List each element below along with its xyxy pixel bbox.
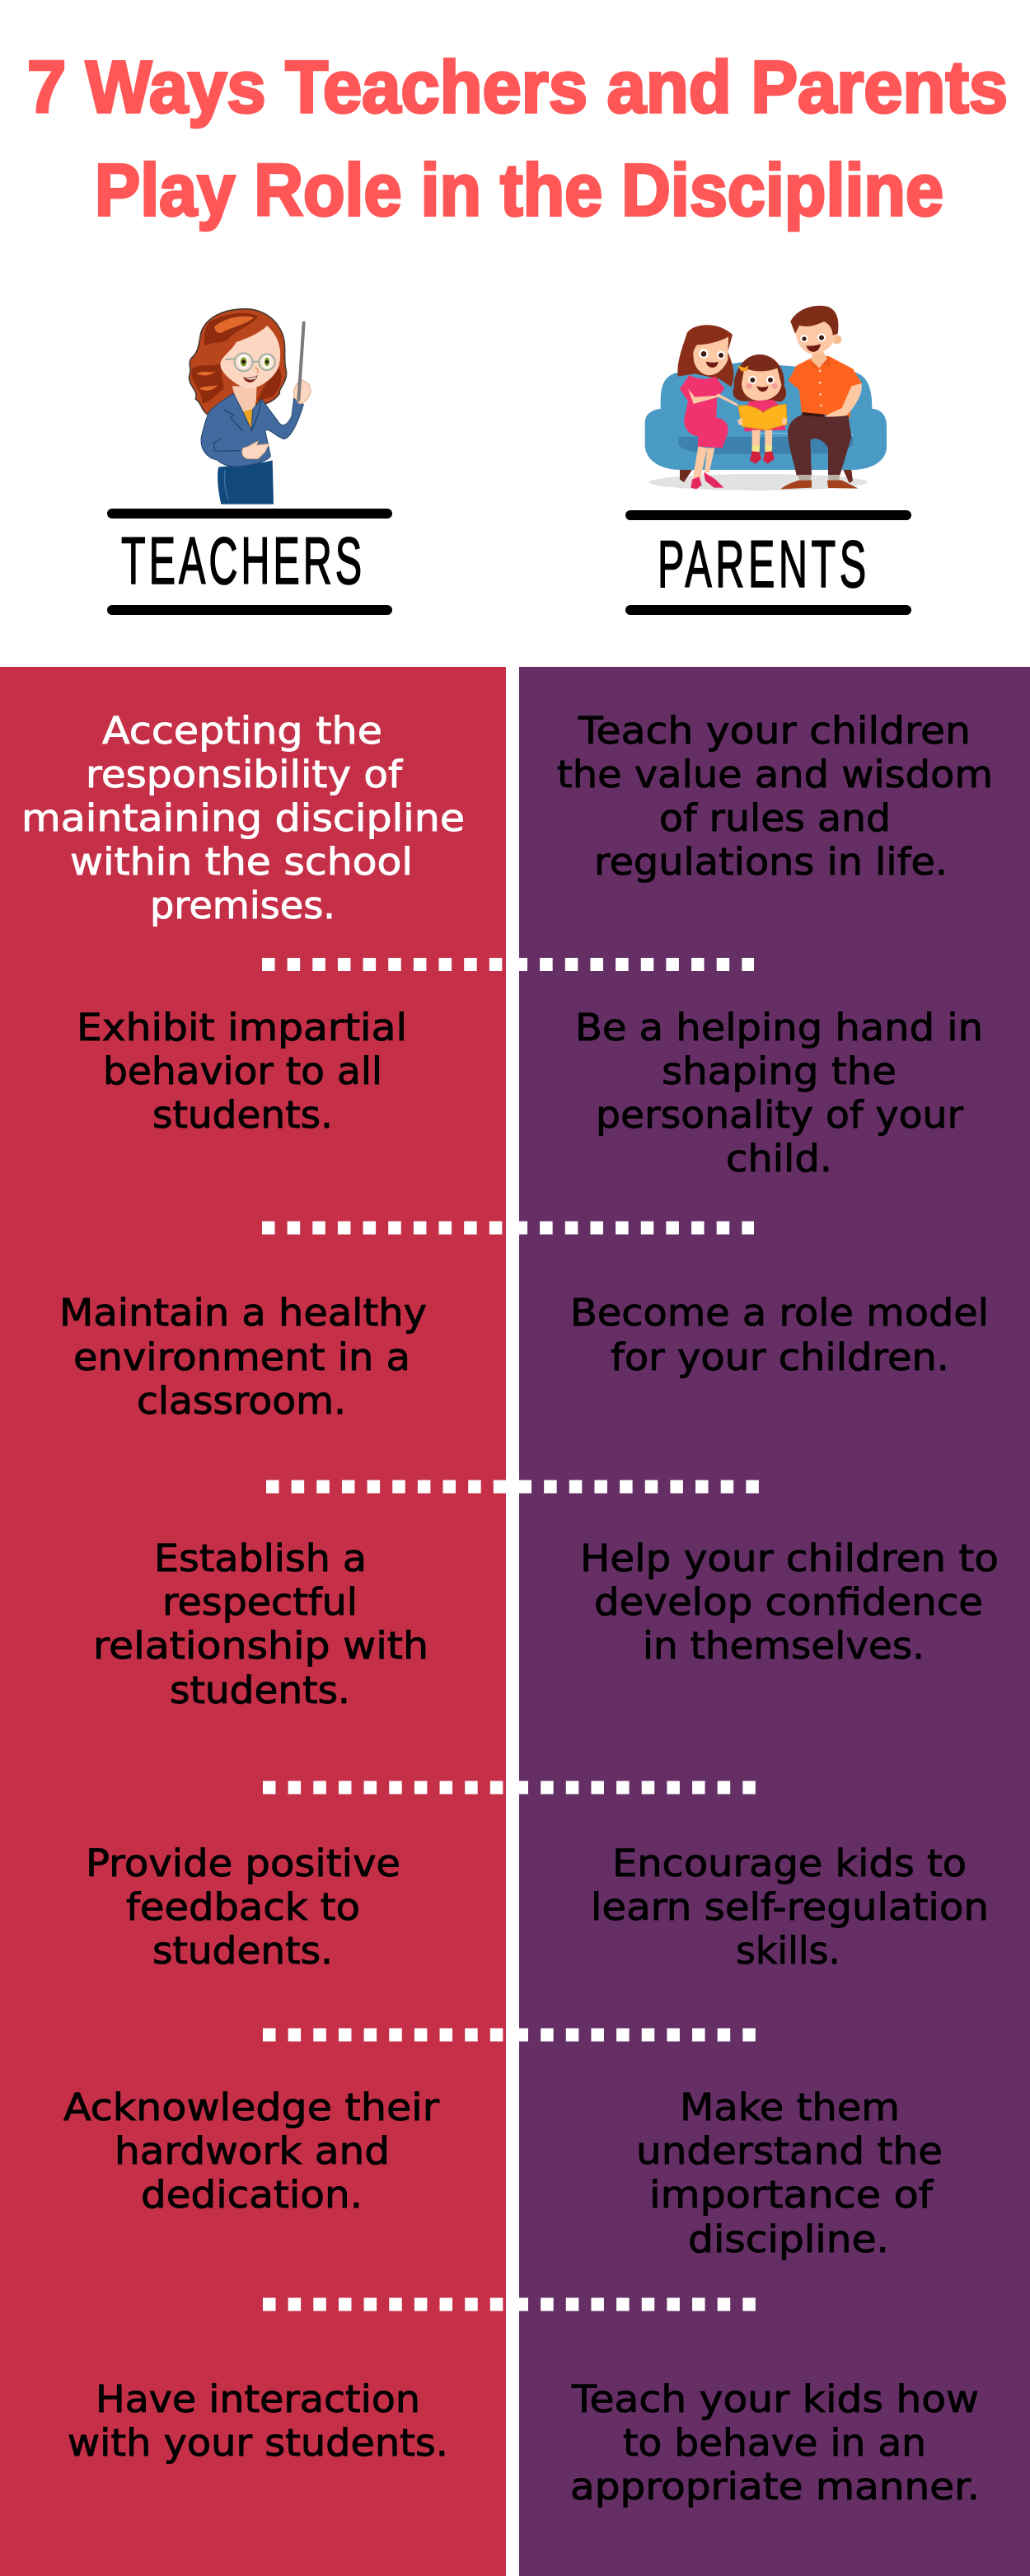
teachers item 6: hardwork and xyxy=(115,2129,390,2173)
teachers item 3: environment in a xyxy=(73,1335,410,1379)
parents item 4: develop confidence xyxy=(594,1580,983,1624)
dotted divider 1 xyxy=(262,958,754,971)
dotted divider 3 xyxy=(266,1480,759,1494)
teachers item 3 xyxy=(59,1291,427,1423)
parents item 3: for your children. xyxy=(611,1335,949,1379)
teachers item 6: dedication. xyxy=(141,2173,363,2217)
teachers item 4 xyxy=(93,1537,428,1712)
parents item 1: the value and wisdom xyxy=(557,753,993,796)
teachers item 6 xyxy=(63,2086,440,2217)
parents item 7: to behave in an xyxy=(623,2421,926,2465)
teachers item 3: Maintain a healthy xyxy=(59,1291,427,1335)
dotted divider 5 xyxy=(263,2028,756,2041)
parents item 2: shaping the xyxy=(662,1049,897,1093)
teachers item 1: premises. xyxy=(150,884,335,927)
teachers item 1: maintaining discipline xyxy=(21,796,465,840)
title: 7 Ways Teachers and Parents xyxy=(27,45,1008,128)
teachers item 4: students. xyxy=(170,1668,350,1712)
teachers label: TEACHERS xyxy=(121,524,362,598)
parents item 5: skills. xyxy=(736,1929,840,1973)
parents item 1: regulations in life. xyxy=(594,840,948,884)
teachers item 7: Have interaction xyxy=(96,2377,420,2421)
icon: teacher illustration xyxy=(190,309,311,504)
title xyxy=(27,45,1008,231)
panel: teachers column xyxy=(0,667,506,2576)
dotted divider 4 xyxy=(263,1781,756,1794)
parents item 3: Become a role model xyxy=(570,1291,989,1335)
panel: parents column xyxy=(519,667,1030,2576)
parents item 5: Encourage kids to xyxy=(612,1842,967,1885)
icon: teachers label rule top xyxy=(107,509,392,518)
icon: teachers label rule bottom xyxy=(107,605,392,615)
teachers item 1: Accepting the xyxy=(102,709,382,753)
teachers item 5: feedback to xyxy=(126,1885,360,1929)
parents item 2: Be a helping hand in xyxy=(575,1006,983,1049)
parents item 4 xyxy=(580,1537,999,1668)
teachers item 5: Provide positive xyxy=(86,1842,400,1885)
parents item 1 xyxy=(557,709,993,884)
teachers item 7 xyxy=(68,2377,448,2465)
parents label: PARENTS xyxy=(658,528,866,602)
icon: parents label rule top xyxy=(625,510,911,520)
teachers item 1 xyxy=(21,709,465,927)
parents item 5: learn self-regulation xyxy=(591,1885,989,1929)
parents item 7: Teach your kids how xyxy=(571,2377,979,2421)
parents item 3 xyxy=(570,1291,989,1379)
icon: family on sofa illustration xyxy=(645,306,887,490)
parents item 6 xyxy=(636,2086,943,2261)
teachers item 4: respectful xyxy=(162,1580,358,1624)
teachers item 2: behavior to all xyxy=(103,1049,382,1093)
parents item 5 xyxy=(591,1842,989,1973)
teachers item 2 xyxy=(77,1006,407,1137)
parents item 6: importance of xyxy=(649,2173,934,2217)
parents item 4: in themselves. xyxy=(643,1624,925,1668)
teachers item 6: Acknowledge their xyxy=(63,2086,440,2129)
teachers item 4: relationship with xyxy=(93,1624,428,1668)
parents item 2: child. xyxy=(726,1137,832,1180)
parents item 6: discipline. xyxy=(688,2217,889,2261)
parents item 2 xyxy=(575,1006,983,1180)
parents item 7: appropriate manner. xyxy=(570,2465,980,2508)
teachers item 5 xyxy=(86,1842,400,1973)
dotted divider 6 xyxy=(263,2298,756,2311)
title: Play Role in the Discipline xyxy=(95,148,943,231)
teachers item 1: within the school xyxy=(70,840,413,884)
teachers item 7: with your students. xyxy=(68,2421,448,2465)
teachers item 4: Establish a xyxy=(154,1537,367,1580)
teachers item 5: students. xyxy=(152,1929,333,1973)
teachers item 1: responsibility of xyxy=(86,753,403,796)
parents item 1: of rules and xyxy=(659,796,891,840)
dotted divider 2 xyxy=(262,1222,754,1235)
parents item 6: Make them xyxy=(680,2086,900,2129)
teachers item 2: Exhibit impartial xyxy=(77,1006,407,1049)
parents item 1: Teach your children xyxy=(578,709,971,753)
parents item 6: understand the xyxy=(636,2129,943,2173)
icon: parents label rule bottom xyxy=(625,605,911,615)
parents item 2: personality of your xyxy=(596,1093,964,1137)
teachers item 2: students. xyxy=(152,1093,333,1137)
parents item 7 xyxy=(570,2377,980,2508)
parents item 4: Help your children to xyxy=(580,1537,999,1580)
teachers item 3: classroom. xyxy=(137,1379,346,1423)
